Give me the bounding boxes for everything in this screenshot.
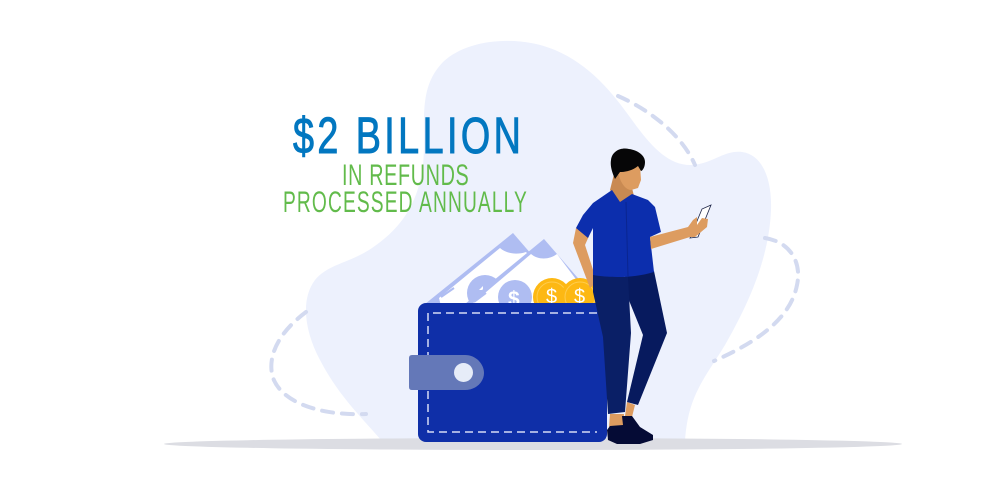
- headline: [283, 106, 527, 219]
- headline figure: $2 BILLION: [293, 106, 521, 164]
- neck: [610, 174, 634, 203]
- bill front: [466, 239, 578, 303]
- coin left: $: [546, 286, 557, 308]
- wallet stitching: [428, 313, 597, 432]
- shoe: [607, 416, 653, 444]
- phone: [690, 205, 711, 238]
- coin left: [533, 278, 566, 303]
- shirt placket: [626, 202, 628, 276]
- subheading line one: IN REFUNDS: [342, 159, 469, 192]
- ankle back: [625, 402, 635, 417]
- clasp button: [454, 363, 473, 382]
- wallet body: [418, 303, 607, 442]
- subheading line two: PROCESSED ANNUALLY: [283, 186, 527, 219]
- wallet: [409, 303, 607, 442]
- hair: [611, 148, 645, 179]
- dashed path: right: [714, 238, 798, 361]
- back arm: [573, 228, 597, 288]
- bill front: $: [508, 288, 520, 311]
- wallet clasp: [409, 355, 484, 390]
- ankle front: [609, 414, 624, 427]
- person: [573, 148, 711, 444]
- face: [618, 165, 641, 190]
- background blob: [306, 41, 771, 441]
- wallet contents: bills and coins: [426, 233, 596, 303]
- coin right: [564, 278, 596, 303]
- shirt: [576, 190, 661, 277]
- ground shadow: [164, 438, 902, 450]
- dashed path: left: [271, 312, 366, 414]
- dashed path: upper right: [618, 96, 695, 165]
- infographic canvas: [164, 41, 902, 450]
- front leg: [593, 274, 631, 414]
- bill back: [426, 233, 529, 303]
- back leg: [625, 271, 667, 405]
- coin right: $: [574, 286, 585, 308]
- front arm and hand: [650, 217, 708, 249]
